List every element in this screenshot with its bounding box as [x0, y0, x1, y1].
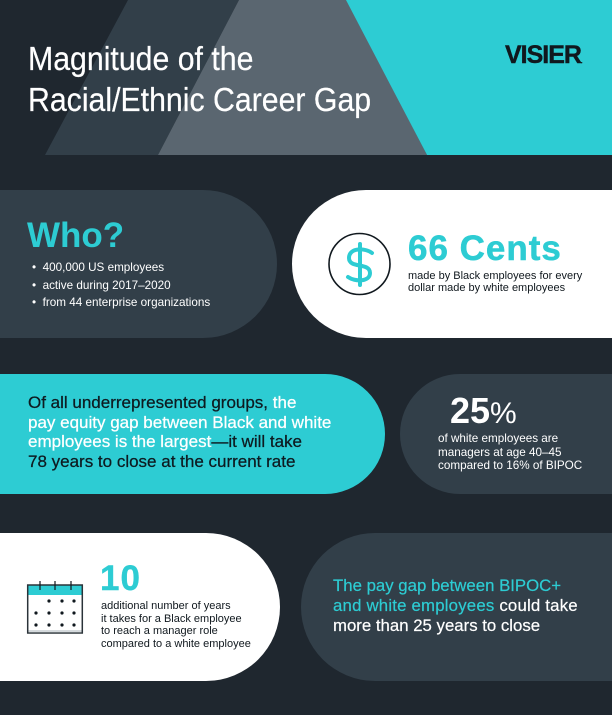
stat: 66 cents: 66 Cents — [408, 229, 562, 268]
text: BIPOC pay gap: The pay gap between BIPOC+ — [333, 576, 561, 595]
text: BIPOC pay gap — [333, 576, 578, 635]
text: BIPOC pay gap: more than 25 years to close — [333, 616, 540, 635]
text: 10 years description: it takes for a Black employee — [101, 613, 242, 625]
title: Racial/Ethnic Career Gap — [28, 81, 371, 118]
text: 25 percent description — [438, 432, 582, 472]
panel: 10 years — [0, 533, 280, 681]
text: pay equity gap: employees is the largest—it will take — [28, 432, 302, 451]
stat: 25 percent: 25% — [450, 390, 517, 431]
text: pay equity gap: Of all underrepresented groups, the — [28, 393, 296, 412]
text: 66 cents description: made by Black employees for every — [408, 270, 582, 282]
text: 25 percent description: of white employees are — [438, 432, 558, 445]
panel: who — [0, 190, 277, 338]
panel: pay equity gap — [0, 374, 385, 494]
list: who details — [32, 261, 210, 309]
header background shapes — [45, 0, 612, 155]
panel: BIPOC pay gap — [301, 533, 612, 681]
text: BIPOC pay gap: and white employees could take — [333, 596, 578, 615]
text: pay equity gap: 78 years to close at the current rate — [28, 452, 295, 470]
text: pay equity gap — [28, 393, 331, 471]
heading: who: Who? — [27, 216, 124, 255]
icon: dollar — [328, 232, 391, 296]
text: 10 years description: to reach a manager role — [101, 625, 218, 637]
text: 66 cents description: dollar made by white employees — [408, 282, 565, 294]
title: Magnitude of the — [28, 40, 253, 77]
list: who details: • 400,000 US employees — [32, 261, 164, 274]
text: 25 percent description: compared to 16% of BIPOC — [438, 459, 582, 472]
text: 25 percent description: managers at age 40–45 — [438, 446, 561, 458]
list: who details: • from 44 enterprise organizations — [32, 296, 210, 309]
panel: 25 percent — [400, 374, 612, 494]
stat: 10: 10 — [100, 559, 141, 598]
text: 66 cents description — [408, 270, 582, 294]
list: who details: • active during 2017–2020 — [32, 278, 171, 292]
logo: visier: VISIER. — [505, 41, 582, 69]
panel: 66 cents — [292, 190, 612, 338]
title — [28, 40, 371, 118]
icon: calendar — [26, 581, 84, 634]
text: 10 years description: compared to a white employee — [101, 638, 251, 650]
text: pay equity gap: pay equity gap between Black and white — [28, 412, 331, 432]
text: 10 years description: additional number of years — [101, 600, 231, 612]
text: 10 years description — [101, 600, 251, 650]
